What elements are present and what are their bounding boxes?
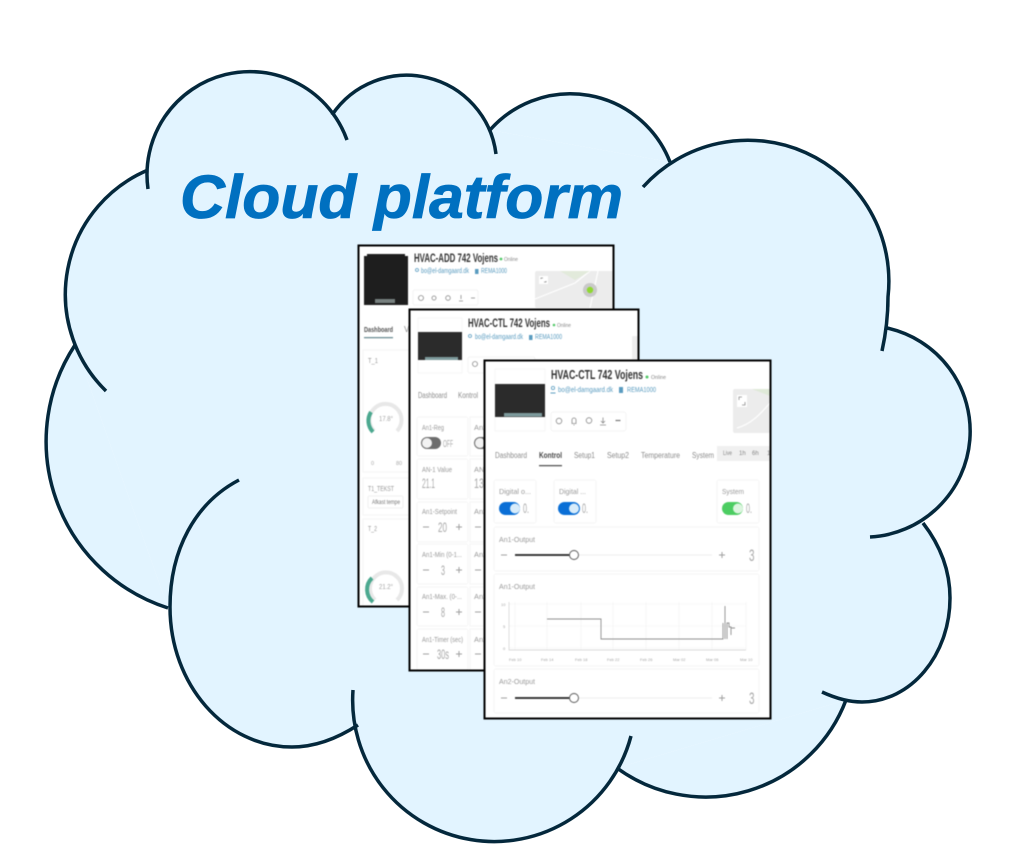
card: An1-Output line chart: Mar 10 (740, 657, 753, 662)
card: T1_TEKST: Afkast tempe (372, 500, 401, 506)
card: An1-Timer: 30s (437, 646, 449, 662)
second column of cards: An2 (474, 550, 487, 559)
card: T_1 gauge: 0 (371, 461, 374, 467)
card: T_1 gauge: 17.8° (379, 415, 393, 423)
contact line: bo@el-damgaard.dk (421, 268, 469, 275)
card: System: System (722, 487, 744, 496)
card: An2-Output slider (494, 669, 759, 713)
card: An1-Output line chart (494, 574, 759, 666)
card: An1-Output slider (494, 527, 759, 571)
time range selector: Live (723, 451, 733, 457)
card: An1-Max (417, 587, 468, 626)
action buttons (413, 290, 478, 305)
tabs: Dashboard (364, 325, 393, 334)
time range selector (717, 446, 771, 461)
card: T_1 gauge (363, 350, 423, 472)
tabs: System (692, 451, 714, 460)
card: Digital output 2: 0. (582, 500, 588, 516)
card: T_2 gauge (363, 519, 423, 607)
contact line: REMA1000 (535, 334, 562, 341)
card: An1-Output line chart: Feb 18 (575, 657, 588, 662)
second column of cards: An2 (474, 635, 487, 644)
device image: HVAC-CTL (418, 318, 462, 373)
second column of cards: An2 (474, 592, 487, 601)
card: Digital output 1: Digital o... (499, 487, 531, 496)
card: An1-Output line chart: Mar 02 (673, 657, 686, 662)
card: An1-Min: 3 (441, 562, 445, 578)
action buttons (468, 357, 535, 373)
card: An1-Output line chart: Feb 10 (509, 657, 522, 662)
device heading: HVAC-CTL 742 Vojens (551, 368, 643, 382)
action buttons (551, 412, 626, 431)
card: AN-1 Value (417, 459, 468, 499)
card: An1-Output slider: 3 (749, 546, 754, 565)
card: AN-1 Value: AN-1 Value (422, 465, 452, 474)
status online: Online (504, 257, 518, 263)
tabs: Temperature (641, 451, 680, 460)
card: An1-Timer (417, 629, 468, 670)
card: Digital output 2: Digital ... (559, 487, 586, 496)
device heading: HVAC-CTL 742 Vojens (468, 318, 550, 330)
title: Cloud platform (180, 163, 623, 231)
card: An1-Min (417, 544, 468, 584)
card: An1-Output line chart: 5 (503, 624, 506, 629)
card: An1-Reg: An1-Reg (422, 423, 444, 432)
card: An1-Reg: OFF (443, 439, 453, 450)
card: An1-Output line chart: Feb 14 (541, 657, 554, 662)
tabs (495, 451, 714, 466)
card: An1-Output line chart: An1-Output (499, 582, 536, 591)
card: An1-Output line chart: Feb 26 (640, 657, 653, 662)
contact line (550, 386, 656, 394)
panel: HVAC-ADD dashboard screenshot (358, 245, 614, 607)
card: An1-Setpoint (417, 502, 468, 542)
contact line: bo@el-damgaard.dk (475, 334, 523, 341)
card: Digital output 1 (494, 480, 536, 523)
card: T_2 gauge: T_2 (368, 524, 377, 533)
card: An1-Output line chart: Mar 06 (706, 657, 719, 662)
tabs (364, 325, 414, 338)
card: AN-1 Value: 21.1 (422, 475, 435, 491)
time range selector: 1h (739, 451, 746, 457)
status online: Online (557, 323, 571, 329)
card: An1-Output line chart: 10 (501, 602, 506, 607)
panel: HVAC-CTL Kontrol screenshot (484, 360, 771, 719)
card: An1-Output slider: An1-Output (499, 535, 536, 544)
card: System (717, 480, 759, 523)
card: T_1 gauge: 80 (396, 461, 402, 467)
device image: HVAC-CTL (495, 369, 545, 431)
status online (553, 323, 571, 329)
card: An2-Output slider: An2-Output (499, 677, 536, 686)
status online: Online (651, 375, 666, 381)
contact line (416, 268, 507, 275)
card: T_2 gauge: 21.2° (379, 583, 393, 591)
contact line: REMA1000 (627, 387, 656, 394)
tabs: Kontrol (539, 451, 562, 460)
tabs: Ve (404, 325, 414, 334)
map (535, 271, 614, 308)
tabs: Dashboard (495, 451, 527, 460)
card: An1-Timer: An1-Timer (sec) (422, 635, 463, 644)
tabs: Kontrol (458, 391, 478, 400)
contact line: bo@el-damgaard.dk (558, 387, 613, 394)
card: An1-Setpoint: 20 (438, 519, 447, 535)
tabs: Setup1 (574, 451, 595, 460)
card: An2-Output slider: 3 (749, 689, 754, 708)
time range selector: 6h (752, 451, 759, 457)
time range selector: 1 (767, 451, 771, 457)
second column of cards: An2 (474, 507, 487, 516)
contact line (468, 334, 562, 341)
card: System: 0. (746, 500, 752, 516)
tabs: Setup2 (607, 451, 629, 460)
tabs (418, 391, 478, 400)
panel: HVAC-CTL settings screenshot (409, 309, 639, 671)
second column of cards: An2 (474, 423, 487, 432)
card: An1-Max: An1-Max. (0-... (422, 592, 462, 601)
map sliver (632, 336, 638, 360)
second column of cards: AN (474, 465, 484, 474)
card: T_1 gauge: T_1 (368, 356, 378, 365)
card: An1-Max: 8 (441, 604, 445, 620)
card: An1-Min: An1-Min (0-1... (422, 550, 462, 559)
card: An1-Setpoint: An1-Setpoint (422, 507, 458, 516)
card: An1-Output line chart: Feb 22 (607, 657, 620, 662)
card: T1_TEKST (363, 478, 423, 515)
device heading: HVAC-ADD 742 Vojens (414, 253, 498, 265)
card: T1_TEKST: T1_TEKST (368, 484, 394, 493)
contact line: REMA1000 (481, 268, 507, 275)
device image: HVAC-ADD (364, 254, 408, 305)
tabs: Dashboard (418, 391, 447, 400)
card: An1-Output line chart: 0 (503, 646, 506, 651)
card: An1-Reg (417, 417, 468, 456)
second column of cards (470, 417, 500, 670)
status online (500, 257, 518, 263)
card: Digital output 1: 0. (523, 500, 529, 516)
card: Digital output 2 (554, 480, 596, 523)
map (733, 389, 770, 433)
second column of cards: 13 (474, 475, 484, 491)
